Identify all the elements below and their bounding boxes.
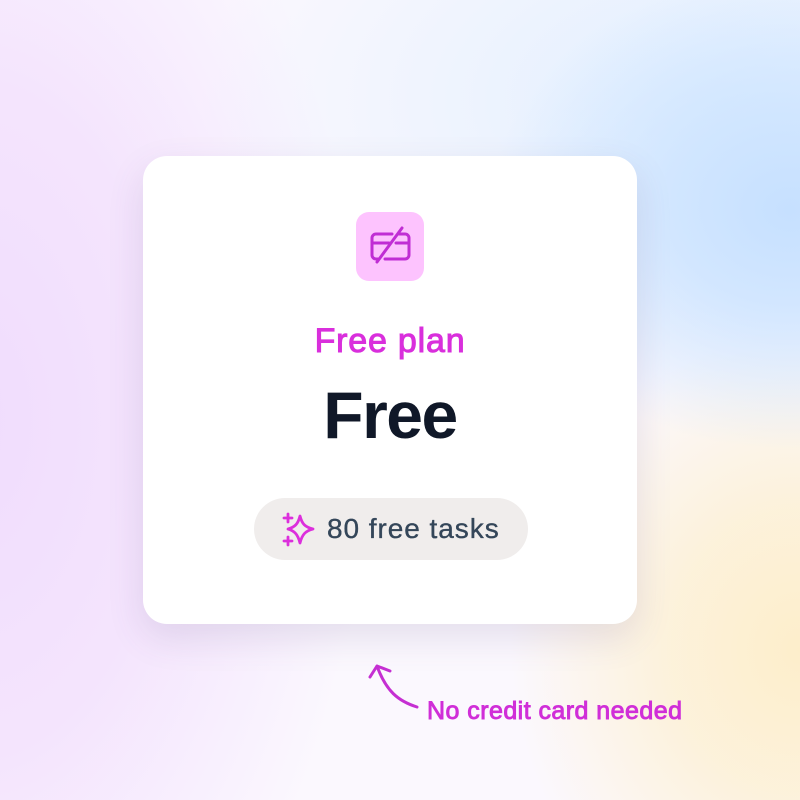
panel: plan card — [143, 156, 637, 624]
pill: free tasks — [254, 498, 528, 560]
arrow: pointing to card — [368, 664, 418, 708]
icon: sparkles — [282, 512, 314, 546]
plan name: Free plan — [315, 322, 465, 360]
price: Free — [323, 378, 457, 452]
pill label: 80 free tasks — [327, 513, 500, 544]
icon: crossed-out credit card — [356, 212, 424, 281]
callout: no credit card needed: No credit card needed — [427, 697, 682, 725]
